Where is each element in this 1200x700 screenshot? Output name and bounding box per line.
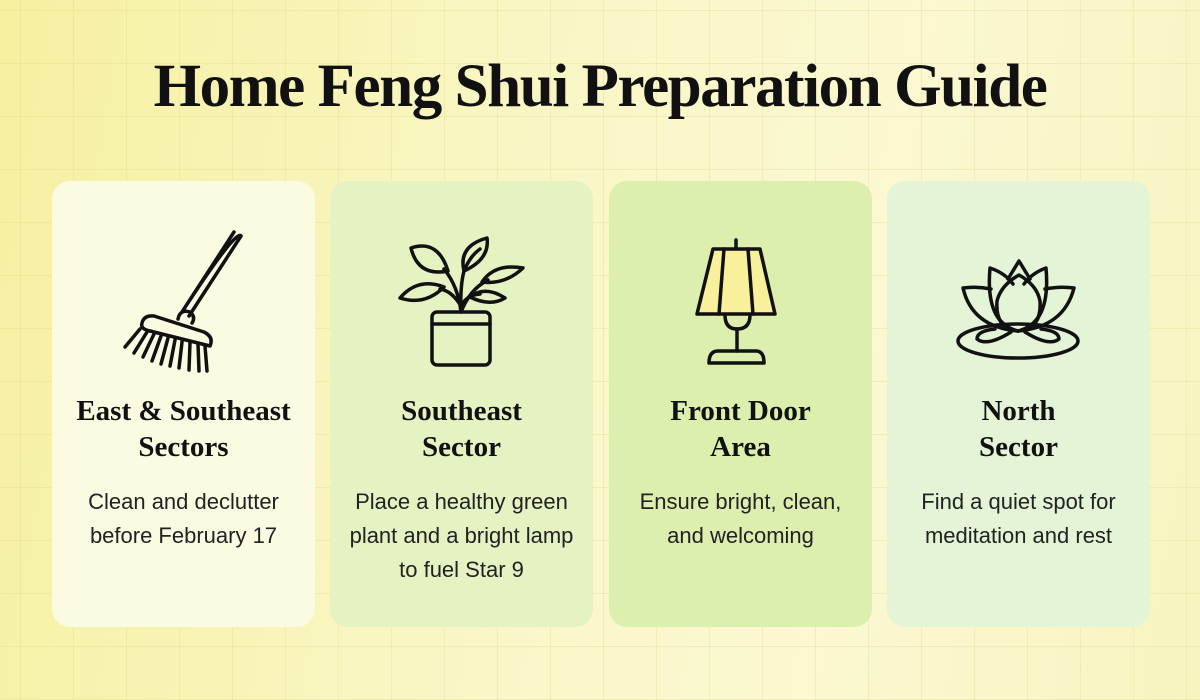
panel: east & southeast [52, 181, 315, 627]
text [88, 489, 279, 548]
heading: North [981, 395, 1056, 427]
icon: plant [398, 236, 525, 367]
text: before February 17 [90, 523, 277, 548]
panel: north [887, 181, 1150, 627]
text: Find a quiet spot for [921, 489, 1116, 514]
text: to fuel Star 9 [399, 557, 524, 582]
text: Place a healthy green [355, 489, 568, 514]
heading [979, 395, 1058, 463]
heading: Sector [979, 431, 1058, 463]
text: Ensure bright, clean, [640, 489, 841, 514]
icon: lamp [695, 238, 777, 365]
panel: front door [609, 181, 872, 627]
heading: Southeast [401, 395, 522, 427]
text [350, 489, 573, 582]
icon: lotus [956, 259, 1080, 360]
heading: Front Door [670, 395, 811, 427]
text: meditation and rest [925, 523, 1112, 548]
heading [670, 395, 811, 463]
heading: East & Southeast [76, 395, 291, 427]
text: and welcoming [667, 523, 814, 548]
text: Clean and declutter [88, 489, 279, 514]
text [921, 489, 1116, 548]
icon: broom [123, 230, 243, 373]
heading: Sectors [138, 431, 229, 463]
heading [401, 395, 522, 463]
heading [76, 395, 291, 463]
panel: southeast [330, 181, 593, 627]
title: Home Feng Shui Preparation Guide [154, 53, 1046, 120]
heading: Sector [422, 431, 501, 463]
heading: Area [710, 431, 771, 463]
text: plant and a bright lamp [350, 523, 573, 548]
text [640, 489, 841, 548]
